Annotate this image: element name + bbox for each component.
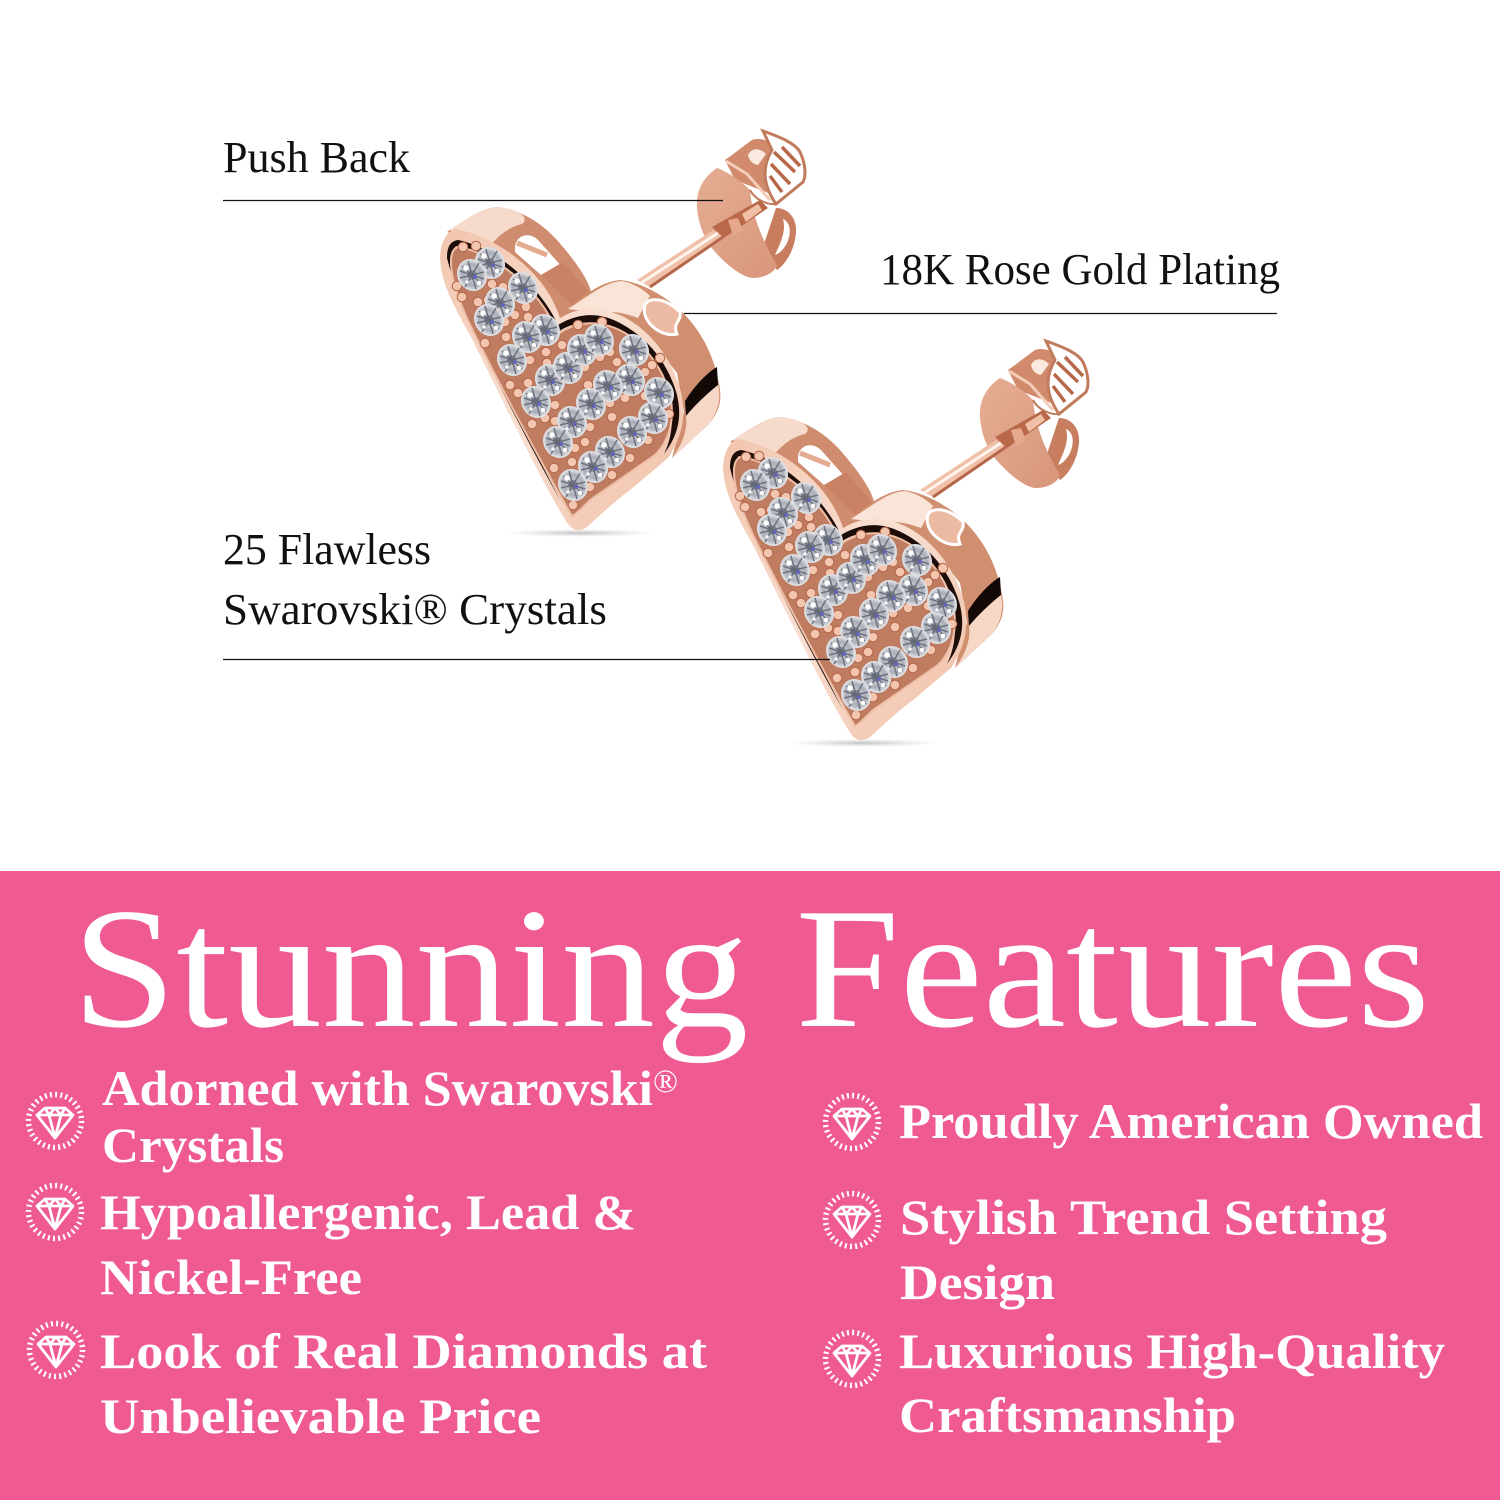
earring: front left <box>440 131 805 537</box>
feature: real diamonds: Look of Real Diamonds at <box>100 1323 707 1379</box>
feature: stylish design: Design <box>900 1254 1055 1310</box>
label: rose gold plating: 18K Rose Gold Plating <box>880 245 1280 294</box>
feature: craftsmanship: Luxurious High-Quality <box>899 1323 1445 1379</box>
feature: swarovski crystals: ® <box>653 1064 678 1100</box>
feature: swarovski crystals <box>28 1060 678 1173</box>
label: crystals: Swarovski® Crystals <box>223 585 607 634</box>
feature: american owned: Proudly American Owned <box>899 1093 1483 1149</box>
feature: craftsmanship: Craftsmanship <box>899 1387 1236 1443</box>
label: crystals: 25 Flawless <box>223 525 431 574</box>
feature: hypoallergenic <box>28 1184 636 1305</box>
feature: stylish design <box>826 1189 1387 1310</box>
earring: back right <box>723 341 1088 747</box>
feature: stylish design: Stylish Trend Setting <box>900 1189 1387 1245</box>
feature: hypoallergenic: Nickel-Free <box>100 1249 362 1305</box>
feature: real diamonds <box>30 1323 707 1444</box>
feature: swarovski crystals: Adorned with Swarovski <box>102 1060 653 1116</box>
feature: swarovski crystals: Crystals <box>102 1117 284 1173</box>
feature: craftsmanship <box>826 1323 1445 1443</box>
panel: stunning features <box>0 871 1500 1500</box>
heading: Stunning Features <box>72 874 1430 1064</box>
label: crystals <box>223 525 830 660</box>
feature: real diamonds: Unbelievable Price <box>100 1388 541 1444</box>
feature: hypoallergenic: Hypoallergenic, Lead & <box>100 1184 636 1240</box>
label: push back: Push Back <box>223 133 410 182</box>
